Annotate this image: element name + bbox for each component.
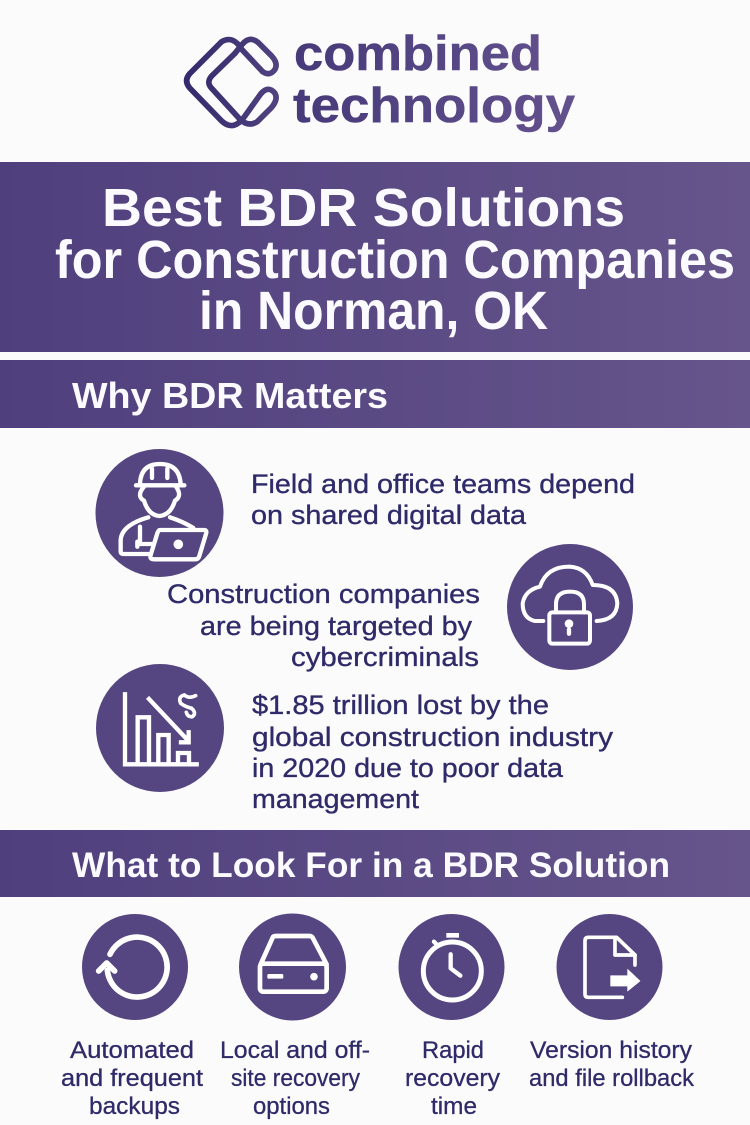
label: rapid recovery time: recovery xyxy=(405,1065,500,1092)
text: cost of poor data management: management xyxy=(252,784,420,814)
icon: automated backups cycle xyxy=(82,914,188,1020)
text: shared digital data: Field and office teams depend xyxy=(251,469,635,499)
section heading: why BDR matters xyxy=(0,360,750,428)
label: version history xyxy=(529,1037,695,1092)
icon: stopwatch xyxy=(398,914,504,1020)
title xyxy=(55,178,735,341)
text: targeted by cybercriminals xyxy=(167,579,480,672)
label: automated backups: Automated xyxy=(70,1037,194,1064)
label: rapid recovery time: time xyxy=(431,1093,477,1120)
icon: file with arrow xyxy=(556,914,662,1020)
text: cost of poor data management: $1.85 trillion lost by the xyxy=(252,690,549,720)
icon: cloud with padlock xyxy=(507,544,633,670)
text: cost of poor data management: in 2020 due to poor data xyxy=(252,753,564,783)
label: local and off-site recovery: site recovery xyxy=(231,1065,360,1092)
label: local and off-site recovery xyxy=(220,1037,370,1120)
logo xyxy=(187,27,575,133)
icon: falling bar chart with dollar sign xyxy=(96,664,224,792)
label: automated backups: and frequent xyxy=(61,1065,203,1092)
label: rapid recovery time xyxy=(405,1037,500,1120)
text: cost of poor data management xyxy=(252,690,614,814)
text: targeted by cybercriminals: are being targeted by xyxy=(200,611,473,641)
text: shared digital data: on shared digital data xyxy=(251,500,527,530)
section heading: what to look for xyxy=(0,830,750,897)
text: targeted by cybercriminals: Construction companies xyxy=(167,579,480,609)
label: version history: Version history xyxy=(530,1037,692,1064)
text: shared digital data xyxy=(251,469,635,530)
label: automated backups xyxy=(61,1037,203,1120)
icon: storage drive xyxy=(239,914,346,1020)
logo wordmark xyxy=(293,27,575,133)
logo wordmark: combined xyxy=(294,27,542,81)
section heading: what to look for: What to Look For in a BDR Solution xyxy=(72,846,670,885)
logo wordmark: technology xyxy=(293,79,575,133)
title: Best BDR Solutions xyxy=(102,178,625,238)
label: local and off-site recovery: options xyxy=(253,1093,330,1120)
label: rapid recovery time: Rapid xyxy=(422,1037,484,1064)
icon: construction worker with laptop xyxy=(96,449,224,577)
text: targeted by cybercriminals: cybercriminals xyxy=(291,642,479,672)
text: cost of poor data management: global construction industry xyxy=(252,722,614,752)
section heading: why BDR matters: Why BDR Matters xyxy=(72,375,388,416)
title: in Norman, OK xyxy=(199,281,548,341)
title banner xyxy=(0,162,750,352)
logo mark xyxy=(187,39,276,126)
label: automated backups: backups xyxy=(89,1093,180,1120)
label: local and off-site recovery: Local and off- xyxy=(220,1037,370,1064)
label: version history: and file rollback xyxy=(529,1065,695,1092)
